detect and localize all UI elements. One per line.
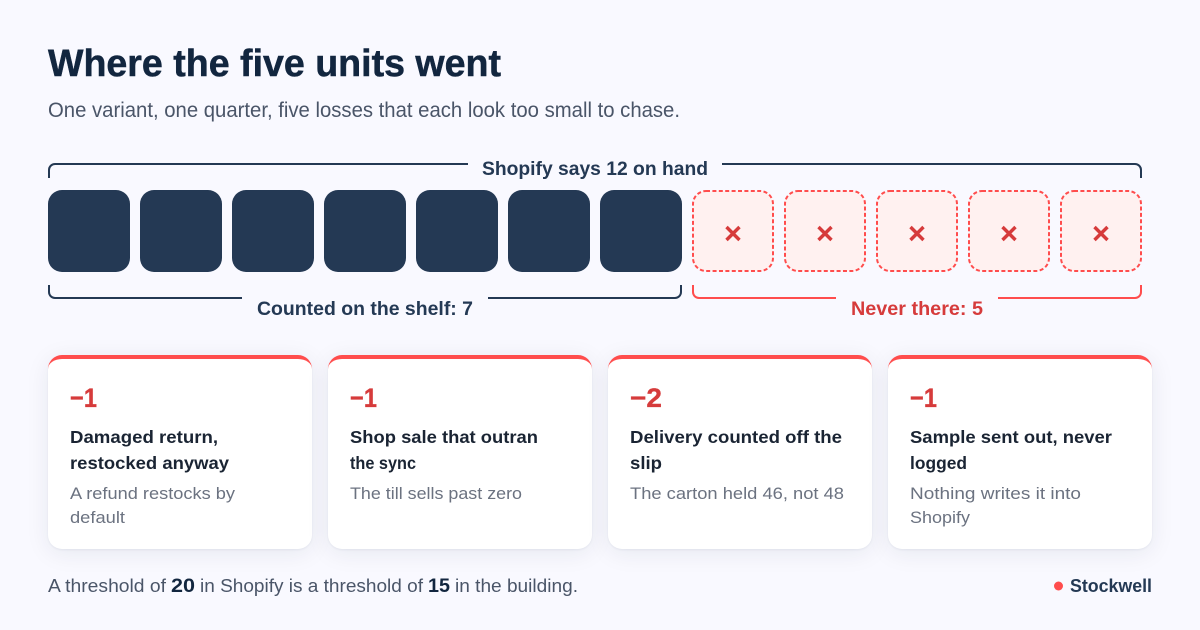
bottom bracket: never there [693,285,1141,320]
card: damaged return: −1 [70,383,97,413]
takeaway sentence: in Shopify is a threshold of [200,576,424,596]
takeaway sentence: A threshold of [48,576,167,596]
card: damaged return: Damaged return, [70,427,218,447]
card: delivery: The carton held 46, not 48 [630,485,844,503]
takeaway sentence: 20 [171,575,195,597]
card: damaged return: default [70,509,125,527]
title: Where the five units went [48,43,501,85]
bottom bracket: counted on the shelf: Counted on the shelf: 7 [257,299,473,320]
counted units: seven dark squares [48,190,682,272]
footer [48,575,1152,597]
card: sample: Nothing writes it into [910,485,1081,503]
card: damaged return [48,355,312,549]
card: damaged return: A refund restocks by [70,485,236,503]
card: delivery [608,355,872,549]
bottom bracket: never there: Never there: 5 [851,299,983,320]
card: sample: logged [910,453,967,473]
brand: Stockwell: Stockwell [1070,576,1152,596]
card: delivery: −2 [630,383,662,413]
top bracket: Shopify says 12 on hand [49,159,1141,180]
card: sample: Shopify [910,509,971,527]
main diagram: title and unit strip [48,43,1142,320]
card: shop sale [328,355,592,549]
card: delivery: slip [630,453,662,473]
card: shop sale: −1 [350,383,377,413]
top bracket: Shopify says 12 on hand: Shopify says 12 on hand [482,159,708,180]
takeaway sentence: in the building. [455,576,578,596]
takeaway sentence: 15 [428,575,450,597]
card: sample: Sample sent out, never [910,427,1112,447]
card: sample [888,355,1152,549]
card: shop sale: Shop sale that outran [350,427,538,447]
card: damaged return: restocked anyway [70,453,229,473]
takeaway sentence [48,575,578,597]
card: shop sale: the sync [350,453,416,473]
card: delivery: Delivery counted off the [630,427,842,447]
missing units: five dashed squares with crosses [693,191,1141,271]
bottom bracket: counted on the shelf [49,285,681,320]
subtitle: One variant, one quarter, five losses that each look too small to chase. [48,99,680,122]
card: shop sale: The till sells past zero [350,485,522,503]
card: sample: −1 [910,383,937,413]
